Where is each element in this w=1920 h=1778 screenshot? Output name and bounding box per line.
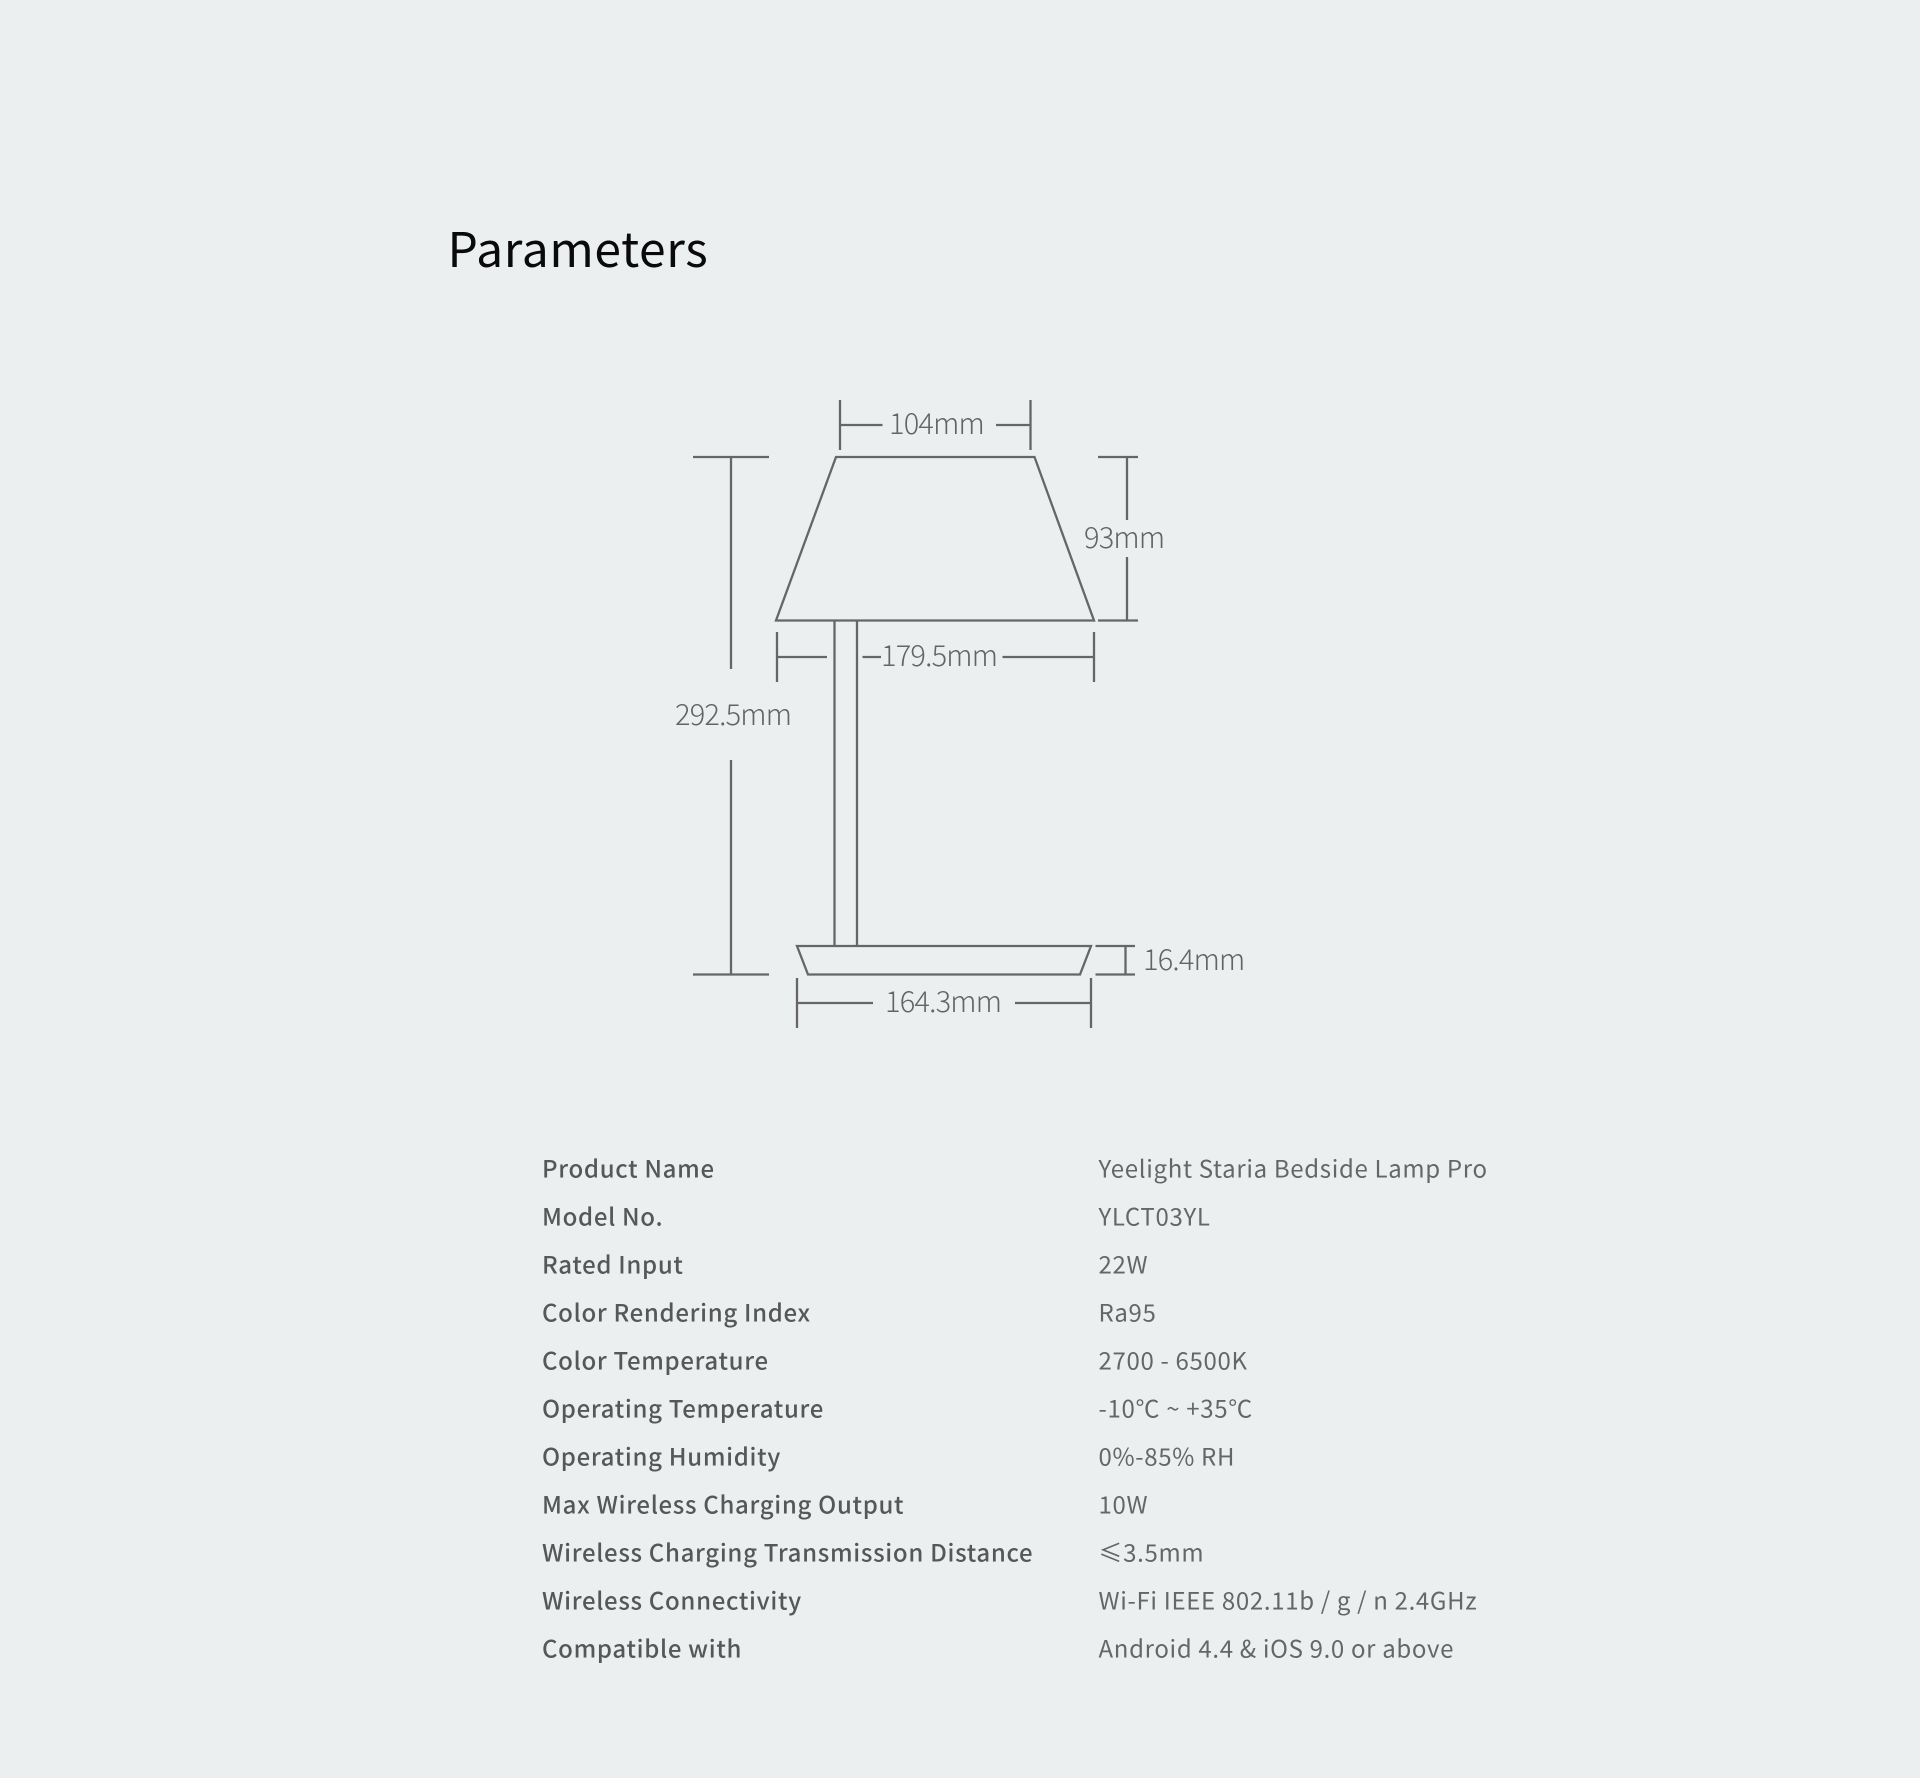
specification table bbox=[542, 1150, 1488, 1664]
row: wireless connectivity: Wi-Fi IEEE 802.11b / g / n 2.4GHz bbox=[1098, 1582, 1477, 1616]
lamp shade bbox=[776, 457, 1094, 620]
title: Parameters bbox=[448, 211, 708, 281]
dimension: top width 104mm: 104mm bbox=[889, 401, 984, 443]
dimension: total height 292.5mm bbox=[675, 457, 791, 974]
row: operating temperature: -10℃ ~ +35℃ bbox=[1098, 1390, 1253, 1424]
dimension: shade height 93mm: 93mm bbox=[1084, 515, 1164, 557]
row: rated input bbox=[542, 1246, 1148, 1280]
dimension: total height 292.5mm: 292.5mm bbox=[675, 692, 791, 734]
row: model number bbox=[542, 1198, 1211, 1232]
row: color temperature: Color Temperature bbox=[542, 1342, 769, 1376]
lamp base bbox=[797, 946, 1091, 974]
row: max wireless charging output bbox=[542, 1486, 1148, 1520]
row: model number: YLCT03YL bbox=[1098, 1198, 1211, 1232]
row: rated input: 22W bbox=[1098, 1246, 1148, 1280]
row: rated input: Rated Input bbox=[542, 1246, 684, 1280]
row: operating temperature bbox=[542, 1390, 1253, 1424]
dimension: base width 164.3mm: 164.3mm bbox=[885, 979, 1001, 1021]
dimension: base height 16.4mm bbox=[1096, 937, 1244, 979]
row: max wireless charging output: 10W bbox=[1098, 1486, 1148, 1520]
row: color rendering index bbox=[542, 1294, 1156, 1328]
row: color temperature: 2700 - 6500K bbox=[1098, 1342, 1248, 1376]
row: operating humidity bbox=[542, 1438, 1235, 1472]
row: transmission distance: ≤3.5mm bbox=[1098, 1534, 1204, 1568]
dimension: shade height 93mm bbox=[1084, 457, 1164, 620]
row: compatibility bbox=[542, 1630, 1454, 1664]
dimension: shade width 179.5mm: 179.5mm bbox=[881, 633, 997, 675]
dimension: base width 164.3mm bbox=[797, 978, 1091, 1028]
row: compatibility: Android 4.4 & iOS 9.0 or above bbox=[1098, 1630, 1454, 1664]
row: color temperature bbox=[542, 1342, 1248, 1376]
row: wireless connectivity bbox=[542, 1582, 1477, 1616]
row: color rendering index: Ra95 bbox=[1098, 1294, 1156, 1328]
row: model number: Model No. bbox=[542, 1198, 663, 1232]
lamp pole bbox=[834, 620, 857, 946]
row: product name bbox=[542, 1150, 1488, 1184]
row: operating humidity: 0%-85% RH bbox=[1098, 1438, 1235, 1472]
row: product name: Product Name bbox=[542, 1150, 715, 1184]
row: transmission distance: Wireless Charging Transmission Distance bbox=[542, 1534, 1033, 1568]
dimension: shade width 179.5mm bbox=[777, 632, 1094, 682]
dimension: top width 104mm bbox=[840, 400, 1030, 450]
row: color rendering index: Color Rendering Index bbox=[542, 1294, 811, 1328]
row: compatibility: Compatible with bbox=[542, 1630, 742, 1664]
row: operating humidity: Operating Humidity bbox=[542, 1438, 781, 1472]
row: max wireless charging output: Max Wireless Charging Output bbox=[542, 1486, 904, 1520]
dimension: base height 16.4mm: 16.4mm bbox=[1143, 937, 1244, 979]
row: wireless connectivity: Wireless Connectivity bbox=[542, 1582, 802, 1616]
row: operating temperature: Operating Temperature bbox=[542, 1390, 824, 1424]
row: product name: Yeelight Staria Bedside Lamp Pro bbox=[1098, 1150, 1488, 1184]
lamp dimension diagram bbox=[675, 400, 1244, 1028]
